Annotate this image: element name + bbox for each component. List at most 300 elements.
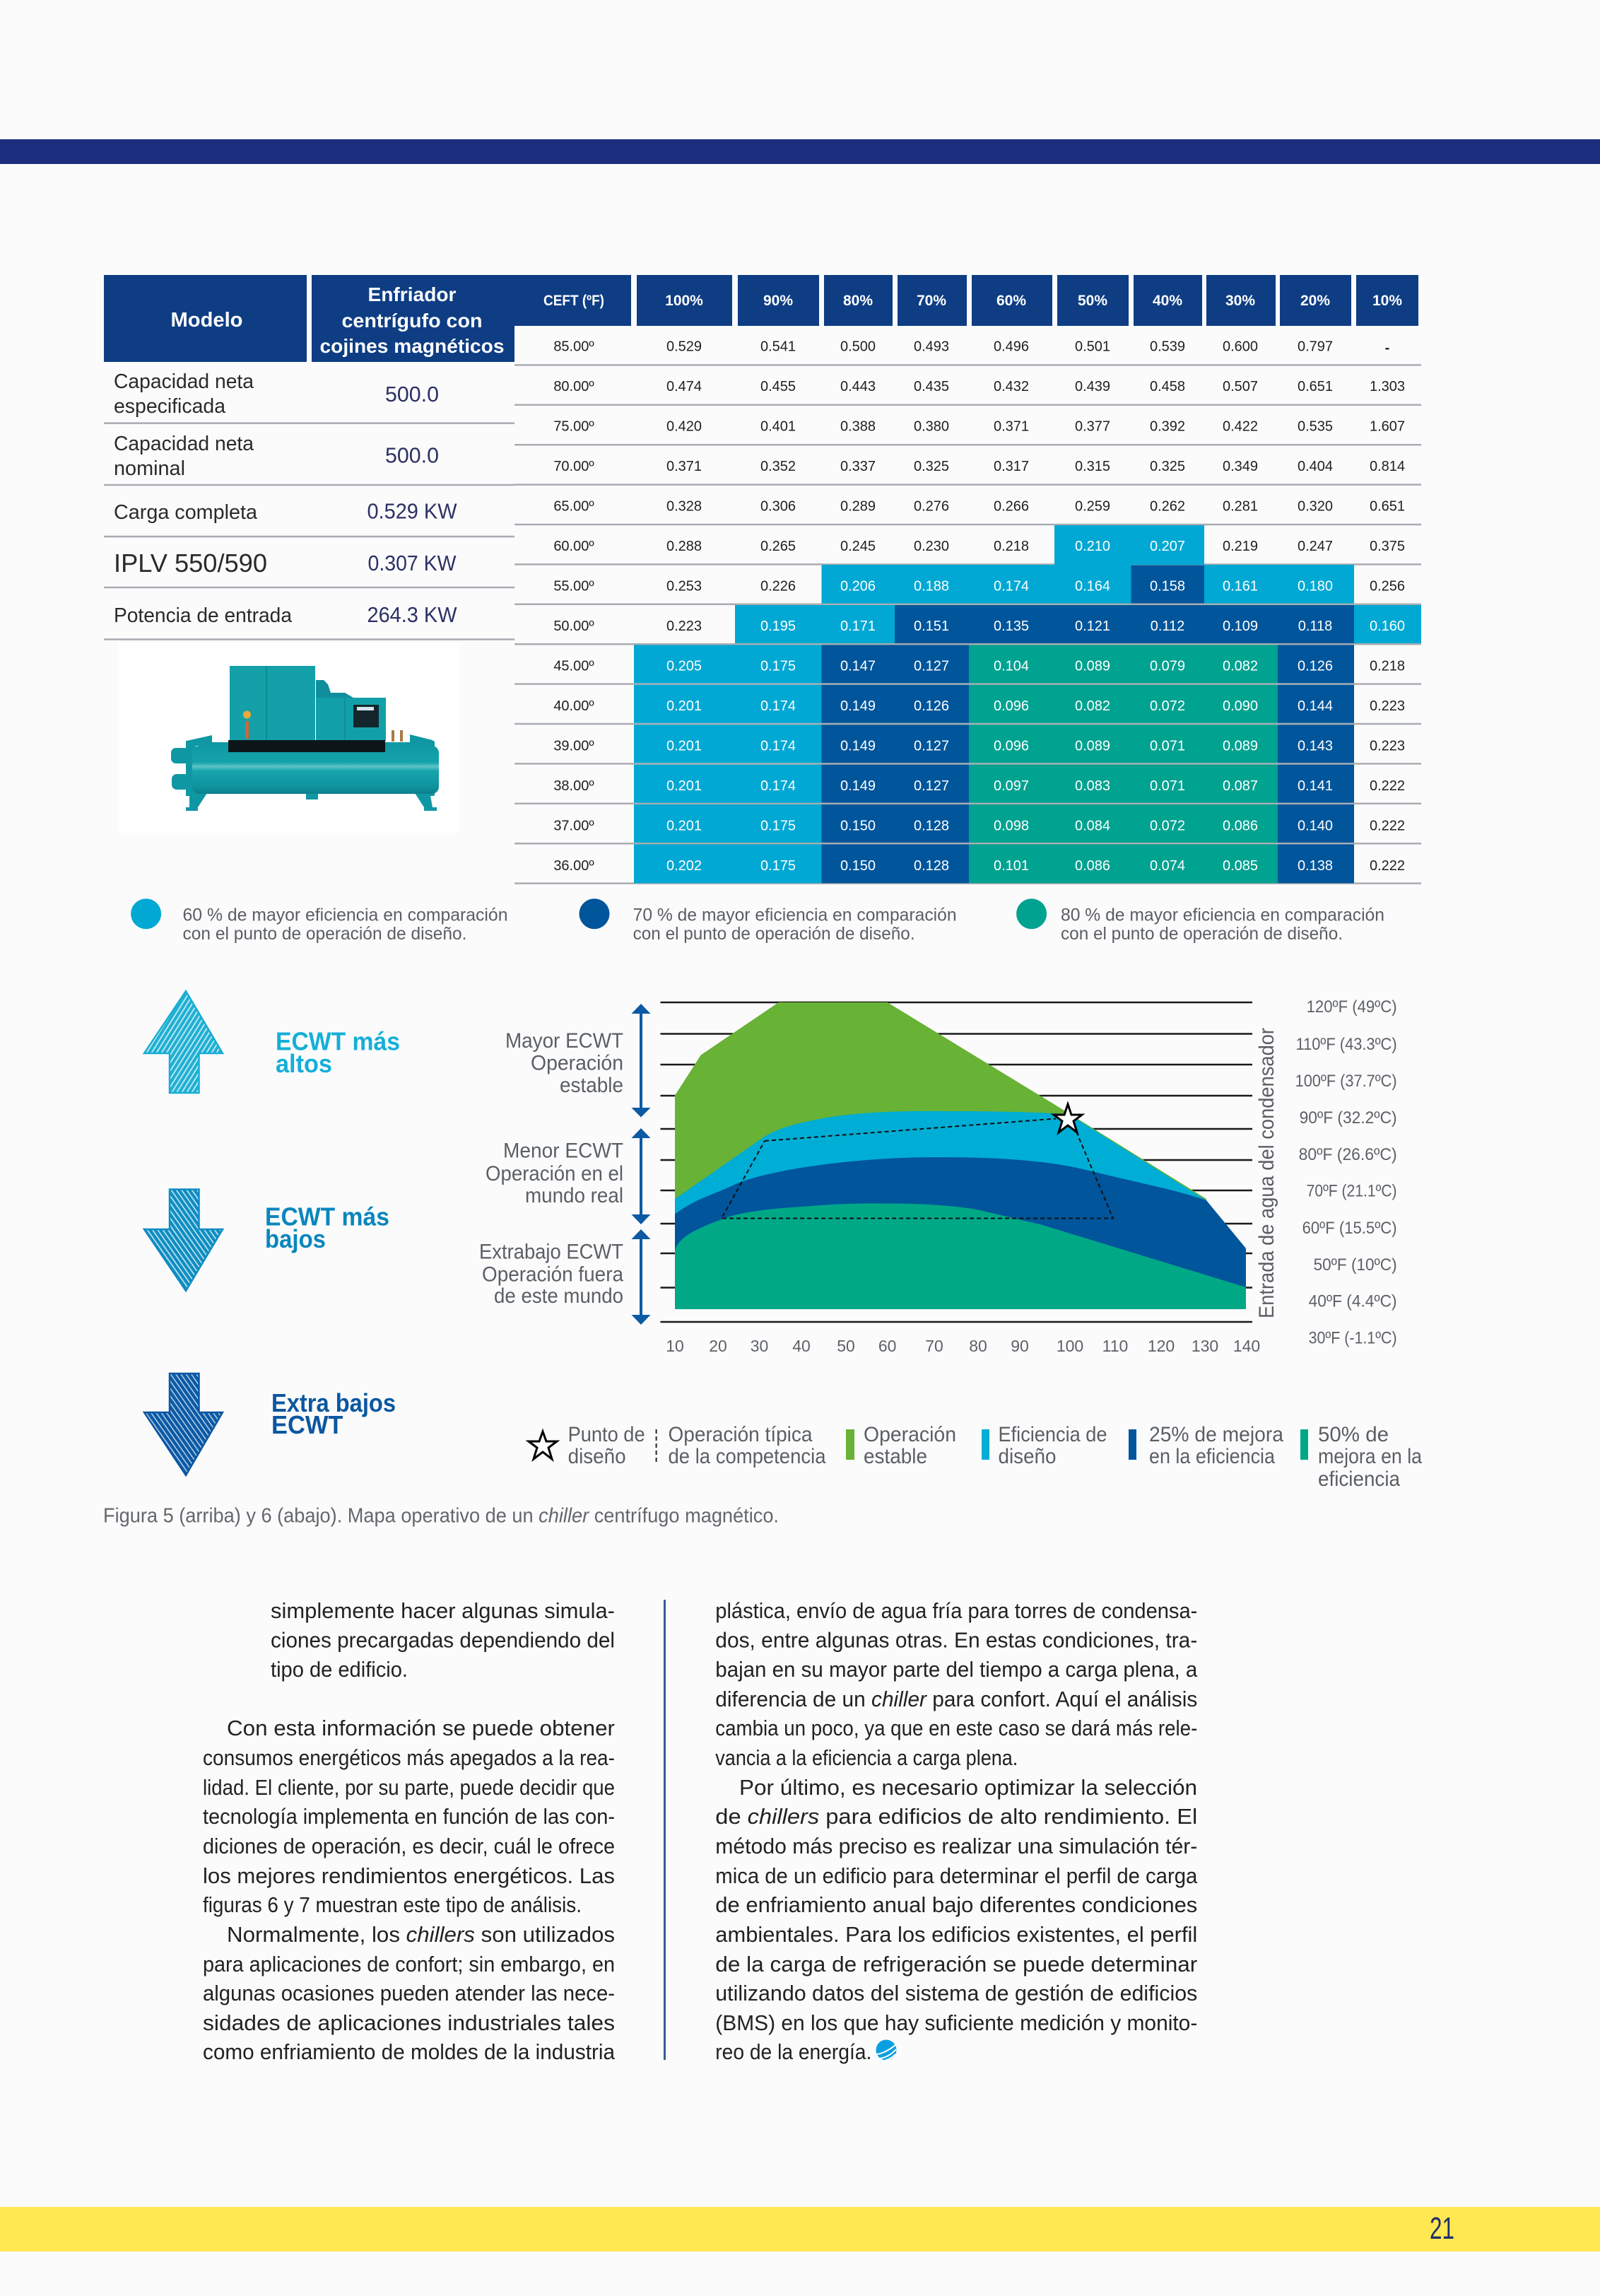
header row: 60% [996,293,1026,309]
range label: lower ECWT: Operación en el [486,1162,623,1185]
area: design efficiency [675,1111,1206,1309]
x axis labels: 130 [1192,1337,1218,1355]
x axis labels: 60 [878,1337,896,1355]
text column left: simplemente hacer algunas simula- [271,1598,615,1623]
row 80.00: 1.303 [1370,379,1405,394]
table: model specifications: Potencia de entrada [114,604,293,627]
row 40.00: 0.201 [666,698,702,714]
row 45.00 [553,659,1405,674]
row 38.00: 0.174 [760,778,796,794]
legend item: design efficiency: diseño [998,1445,1056,1468]
row 50.00: 0.195 [760,619,796,634]
row 50.00: 0.112 [1151,619,1184,634]
label: ECWT más altos [276,1027,400,1078]
label: Extra bajos ECWT [271,1388,396,1439]
row 40.00: 0.072 [1150,698,1185,714]
typical competitor operation outline [722,1118,1113,1219]
y axis labels: 80ºF (26.6ºC) [1299,1145,1397,1164]
row 75.00 [553,418,1405,434]
row 75.00: 1.607 [1370,418,1405,434]
y axis labels: 40ºF (4.4ºC) [1309,1292,1397,1311]
row 40.00: 0.174 [760,698,796,714]
row 40.00: 0.223 [1370,698,1405,714]
row 75.00: 0.420 [666,418,702,434]
x axis labels: 80 [969,1337,987,1355]
text column left [203,1598,616,2064]
text column left: sidades de aplicaciones industriales tales [203,2010,615,2035]
row 45.00: 45.00º [553,659,594,674]
table: model specifications: 0.307 KW [367,551,457,575]
row 70.00: 0.337 [840,459,876,474]
text column right: de enfriamiento anual bajo diferentes condiciones [715,1892,1197,1917]
row 65.00: 0.651 [1370,499,1405,515]
row 45.00: 0.126 [1298,659,1333,674]
x axis labels: 100 [1057,1337,1083,1355]
row 60.00: 0.218 [994,539,1029,554]
legend item: 60%: 60 % de mayor eficiencia en comparación [182,906,507,925]
row 55.00 [553,578,1405,594]
row 60.00: 0.210 [1075,539,1110,554]
text column left: tipo de edificio. [271,1657,408,1682]
row 39.00: 0.174 [760,738,796,754]
text column right: reo de la energía. [715,2039,871,2064]
row 75.00: 0.371 [994,418,1029,434]
chart: operating map [660,997,1397,1355]
legend item: design efficiency [982,1423,1107,1468]
row 36.00: 0.202 [666,858,702,874]
row 50.00 [553,619,1405,634]
row 85.00: 0.529 [666,339,702,355]
row 65.00 [553,499,1405,515]
page number: 21 [1430,2211,1454,2246]
header row: 30% [1225,293,1255,309]
row 36.00: 0.074 [1150,858,1185,874]
row 55.00: 0.256 [1370,578,1405,594]
row 36.00: 0.085 [1223,858,1258,874]
row 60.00: 0.375 [1370,539,1405,554]
row 39.00: 0.089 [1223,738,1258,754]
row 45.00: 0.082 [1223,659,1258,674]
row 55.00: 0.174 [994,578,1029,594]
row 70.00: 0.325 [914,459,949,474]
y axis labels: 120ºF (49ºC) [1307,997,1397,1017]
row 50.00: 0.118 [1298,619,1332,634]
row 38.00 [553,778,1405,794]
row 60.00: 0.265 [760,539,796,554]
row 40.00: 0.144 [1298,698,1333,714]
row 37.00: 0.201 [666,819,702,834]
row 50.00: 0.135 [994,619,1029,634]
icon: up arrow, higher ECWT [144,991,223,1093]
table: model specifications: 0.529 KW [367,499,457,523]
table: model specifications: cojines magnéticos [319,335,505,357]
legend item: 25% improvement: en la eficiencia [1149,1445,1275,1468]
row 45.00: 0.147 [840,659,876,674]
row 45.00: 0.175 [760,659,796,674]
row 65.00: 0.328 [666,499,702,515]
row 80.00: 0.432 [994,379,1029,394]
legend item: 70% [580,898,957,944]
header row: 10% [1372,293,1402,309]
row 70.00: 0.352 [760,459,796,474]
colored efficiency cells [634,525,1421,883]
row 38.00: 0.222 [1370,778,1405,794]
text column right: (BMS) en los que hay suficiente medición y monito- [715,2010,1197,2035]
row 55.00: 55.00º [553,578,594,594]
column divider [664,1600,666,2060]
range label: extra low ECWT: de este mundo [494,1284,623,1308]
row 55.00: 0.226 [760,578,796,594]
area: stable operation [675,1002,1206,1309]
row 65.00: 65.00º [553,499,594,515]
row 39.00: 0.149 [840,738,876,754]
row 37.00: 0.140 [1298,819,1333,834]
row 37.00 [553,819,1405,834]
row 36.00: 0.101 [994,858,1029,874]
text column right: bajan en su mayor parte del tiempo a carga plena, a [715,1657,1198,1682]
text column right: de la carga de refrigeración se puede determinar [715,1952,1197,1976]
legend item: stable operation [846,1423,956,1468]
row 37.00: 0.150 [840,819,876,834]
row 80.00: 0.651 [1298,379,1333,394]
row 36.00: 0.150 [840,858,876,874]
row 38.00: 0.149 [840,778,876,794]
row 80.00: 0.435 [914,379,949,394]
row 40.00 [553,698,1405,714]
row 85.00: 0.539 [1150,339,1185,355]
legend item: 50% improvement: eficiencia [1318,1468,1400,1491]
row 39.00: 0.127 [914,738,949,754]
row 85.00: - [1385,341,1389,356]
header row: 80% [843,293,873,309]
row 37.00: 37.00º [553,819,594,834]
range label: extra low ECWT: Operación fuera [482,1263,623,1287]
header row: 70% [917,293,946,309]
legend item: design point: Punto de [568,1423,645,1446]
row 55.00: 0.161 [1223,578,1258,594]
header row: 100% [665,293,703,309]
text column right: utilizando datos del sistema de gestión de edificios [715,1981,1197,2005]
row 85.00: 0.797 [1298,339,1333,355]
row 65.00: 0.320 [1298,499,1333,515]
row 39.00: 0.143 [1298,738,1333,754]
row 36.00: 0.222 [1370,858,1405,874]
table: model specifications: Carga completa [114,501,258,524]
y axis labels: 100ºF (37.7ºC) [1295,1072,1397,1091]
row 85.00: 0.500 [840,339,876,355]
text column right: de chillers para edificios de alto rendimiento. El [715,1804,1197,1829]
row 85.00: 0.600 [1223,339,1258,355]
table: model specifications: nominal [114,457,185,480]
row 55.00: 0.206 [840,578,876,594]
x axis labels: 120 [1148,1337,1175,1355]
x axis labels: 90 [1011,1337,1029,1355]
row 37.00: 0.222 [1370,819,1405,834]
row 36.00: 0.086 [1075,858,1110,874]
row 70.00: 0.325 [1150,459,1185,474]
row 38.00: 38.00º [553,778,594,794]
row 50.00: 0.109 [1223,619,1258,634]
text column right: diferencia de un chiller para confort. Aquí el análisis [715,1687,1197,1711]
range label: extra low ECWT: Extrabajo ECWT [479,1240,623,1264]
photo: magnetic bearing centrifugal chiller [119,643,459,833]
y axis labels: 60ºF (15.5ºC) [1302,1219,1397,1238]
row 55.00: 0.188 [914,578,949,594]
row 50.00: 0.160 [1370,619,1405,634]
row 38.00: 0.087 [1223,778,1258,794]
row 38.00: 0.201 [666,778,702,794]
row 60.00: 0.230 [914,539,949,554]
row 36.00: 0.128 [914,858,949,874]
table: model specifications: centrígufo con [342,310,482,332]
area: 25% efficiency improvement [675,1157,1246,1309]
legend item: 25% improvement: 25% de mejora [1149,1423,1283,1446]
text column left: consumos energéticos más apegados a la rea- [203,1745,615,1770]
table: model specifications: Capacidad neta [114,433,254,455]
text column left: Con esta información se puede obtener [227,1716,615,1740]
range label: extra low ECWT [479,1240,623,1308]
legend item: 80%: con el punto de operación de diseño. [1061,924,1343,944]
row 80.00: 0.455 [760,379,796,394]
table: model specifications: Enfriador [367,283,457,305]
table: part-load efficiency matrix [514,275,1421,884]
x axis labels: 30 [751,1337,768,1355]
row 65.00: 0.262 [1150,499,1185,515]
legend item: stable operation: estable [864,1445,927,1468]
x axis labels: 70 [925,1337,943,1355]
legend item: design point: diseño [568,1445,626,1468]
range label: higher ECWT [505,1029,623,1097]
legend item: 60% [131,898,508,944]
table: model specifications [104,275,514,639]
row 37.00: 0.086 [1223,819,1258,834]
table: model specifications: especificada [114,395,226,418]
row 40.00: 0.082 [1075,698,1110,714]
row 39.00: 39.00º [553,738,594,754]
row 37.00: 0.072 [1150,819,1185,834]
legend item: typical competitor operation: Operación típica [669,1423,813,1446]
legend item: design efficiency: Eficiencia de [998,1423,1107,1446]
text column right: Por último, es necesario optimizar la selección [739,1775,1197,1800]
legend: table efficiency colors [131,898,1384,944]
y axis labels: 30ºF (-1.1ºC) [1309,1329,1397,1348]
legend item: stable operation: Operación [864,1423,956,1446]
range label: lower ECWT: Menor ECWT [503,1140,623,1163]
footer band [0,2207,1600,2251]
row 85.00: 0.493 [914,339,949,355]
row 37.00: 0.084 [1075,819,1110,834]
row 37.00: 0.128 [914,819,949,834]
row 85.00: 0.501 [1075,339,1110,355]
row 45.00: 0.127 [914,659,949,674]
row 36.00: 0.138 [1298,858,1333,874]
text column left: ciones precargadas dependiendo del [271,1628,615,1653]
row 55.00: 0.158 [1150,578,1185,594]
top band [0,139,1600,164]
row 38.00: 0.127 [914,778,949,794]
label: ECWT más bajos [265,1202,389,1253]
row 45.00: 0.089 [1075,659,1110,674]
row 75.00: 75.00º [553,418,594,434]
arrow: higher ECWT range [632,1004,650,1117]
row 40.00: 40.00º [553,698,594,714]
row 55.00: 0.164 [1075,578,1110,594]
legend item: 70%: con el punto de operación de diseño. [633,924,915,944]
legend item: 60%: con el punto de operación de diseño. [182,924,466,944]
label: Extra bajos ECWT: ECWT [271,1410,343,1439]
row 65.00: 0.281 [1223,499,1258,515]
row 36.00 [553,858,1405,874]
icon: design point star [1054,1104,1082,1132]
row 37.00: 0.098 [994,819,1029,834]
row 75.00: 0.377 [1075,418,1110,434]
arrow: extra low ECWT range [632,1229,650,1325]
table: model specifications: IPLV 550/590 [114,549,267,578]
row rules [514,365,1421,884]
label: Extra bajos ECWT: Extra bajos [271,1388,396,1417]
row 70.00: 0.371 [666,459,702,474]
row 75.00: 0.401 [760,418,796,434]
text column left: Normalmente, los chillers son utilizados [227,1922,615,1947]
row 65.00: 0.306 [760,499,796,515]
row 60.00 [553,539,1405,554]
header row: 20% [1300,293,1330,309]
label: ECWT más altos: altos [276,1049,332,1078]
y axis labels: 110ºF (43.3ºC) [1296,1035,1397,1054]
x axis labels: 50 [837,1337,855,1355]
header row: 50% [1078,293,1107,309]
range label: lower ECWT [486,1140,623,1207]
row 70.00: 0.404 [1298,459,1333,474]
arrow: lower ECWT range [632,1128,650,1224]
row 80.00 [553,379,1405,394]
text column left: para aplicaciones de confort; sin embargo, en [203,1952,615,1976]
row 40.00: 0.090 [1223,698,1258,714]
row 36.00: 36.00º [553,858,594,874]
x axis labels: 110 [1102,1337,1128,1355]
text column left: diciones de operación, es decir, cuál le ofrece [203,1834,615,1858]
row 37.00: 0.175 [760,819,796,834]
icon: down arrow, extra low ECWT [144,1374,223,1475]
y axis title: Entrada de agua del condensador [1255,1028,1278,1318]
row 60.00: 0.245 [840,539,876,554]
legend item: design point [529,1423,645,1468]
row 50.00: 0.121 [1075,619,1110,634]
row 60.00: 0.219 [1223,539,1258,554]
y axis labels: 50ºF (10ºC) [1314,1255,1397,1275]
x axis labels: 10 [666,1337,684,1355]
legend item: 50% improvement: mejora en la [1318,1445,1422,1468]
row 80.00: 0.458 [1150,379,1185,394]
row 75.00: 0.422 [1223,418,1258,434]
row 70.00: 0.317 [994,459,1029,474]
row 80.00: 0.443 [840,379,876,394]
row 85.00: 0.541 [760,339,796,355]
row 40.00: 0.126 [914,698,949,714]
row 75.00: 0.535 [1298,418,1333,434]
row 70.00 [553,459,1405,474]
text column left: algunas ocasiones pueden atender las nece- [203,1981,615,2005]
row 38.00: 0.097 [994,778,1029,794]
table: model specifications: Modelo [171,309,243,332]
label: ECWT más bajos: ECWT más [265,1202,389,1231]
icon: down arrow, lower ECWT [144,1189,223,1291]
row 70.00: 70.00º [553,459,594,474]
row 80.00: 0.507 [1223,379,1258,394]
row 80.00: 80.00º [553,379,594,394]
text column right: ambientales. Para los edificios existentes, el perfil [715,1922,1197,1947]
row 60.00: 60.00º [553,539,594,554]
legend item: 80% [1016,898,1384,944]
row 38.00: 0.141 [1298,778,1333,794]
row 75.00: 0.388 [840,418,876,434]
range label: lower ECWT: mundo real [525,1184,623,1207]
x axis labels: 20 [709,1337,727,1355]
legend item: 80%: 80 % de mayor eficiencia en comparación [1061,906,1384,925]
row 50.00: 0.151 [914,619,949,634]
text column right: cambia un poco, ya que en este caso se dará más rele- [715,1716,1197,1740]
text column right: método más preciso es realizar una simulación tér- [715,1834,1197,1858]
row 85.00 [553,339,1389,356]
row 80.00: 0.439 [1075,379,1110,394]
text column right: dos, entre algunas otras. En estas condiciones, tra- [715,1628,1197,1653]
y axis labels: 90ºF (32.2ºC) [1300,1108,1397,1128]
row 60.00: 0.247 [1298,539,1333,554]
text column left: tecnología implementa en función de las con- [203,1804,615,1829]
row 45.00: 0.205 [666,659,702,674]
area: 50% efficiency improvement [675,1203,1246,1309]
row 39.00 [553,738,1405,754]
legend item: 25% improvement [1129,1423,1283,1468]
row 39.00: 0.201 [666,738,702,754]
row 40.00: 0.096 [994,698,1029,714]
row 65.00: 0.276 [914,499,949,515]
x axis labels: 140 [1233,1337,1260,1355]
x axis labels [666,1337,1260,1355]
y axis labels: 70ºF (21.1ºC) [1307,1182,1397,1200]
row 70.00: 0.814 [1370,459,1405,474]
row 38.00: 0.083 [1075,778,1110,794]
row 50.00: 0.171 [840,619,876,634]
row 70.00: 0.349 [1223,459,1258,474]
row 45.00: 0.079 [1150,659,1185,674]
row 39.00: 0.071 [1150,738,1185,754]
figure caption: Figura 5 (arriba) y 6 (abajo). Mapa operativo de un chiller centrífugo magnético. [103,1504,779,1527]
row 39.00: 0.096 [994,738,1029,754]
text column right: vancia a la eficiencia a carga plena. [715,1745,1018,1770]
legend: chart [529,1423,1422,1491]
row 65.00: 0.289 [840,499,876,515]
range label: higher ECWT: Operación [531,1052,623,1075]
text column left: los mejores rendimientos energéticos. Las [203,1863,615,1888]
table: model specifications: 264.3 KW [367,602,457,627]
row 60.00: 0.207 [1150,539,1185,554]
row 60.00: 0.288 [666,539,702,554]
range label: higher ECWT: estable [560,1074,623,1097]
label: ECWT más altos: ECWT más [276,1027,400,1056]
table: model specifications: Capacidad neta [114,370,254,393]
row 85.00: 85.00º [553,339,594,355]
row 50.00: 0.223 [666,619,702,634]
legend item: 70%: 70 % de mayor eficiencia en comparación [633,906,957,925]
row 65.00: 0.259 [1075,499,1110,515]
row 45.00: 0.218 [1370,659,1405,674]
row 50.00: 50.00º [553,619,594,634]
row 85.00: 0.496 [994,339,1029,355]
text column left: lidad. El cliente, por su parte, puede decidir que [203,1775,615,1800]
header row: 40% [1153,293,1182,309]
row 38.00: 0.071 [1150,778,1185,794]
